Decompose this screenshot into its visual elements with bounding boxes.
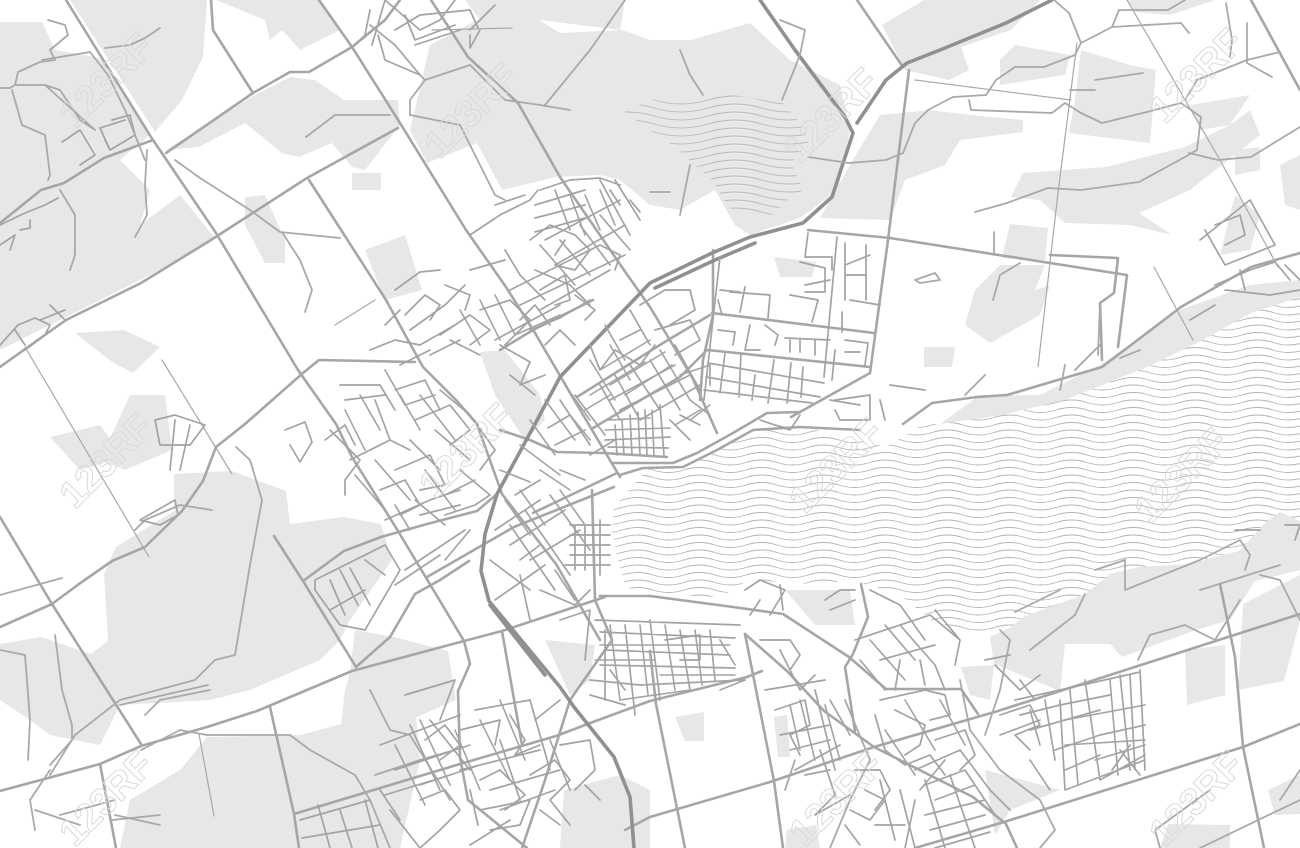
watermark: 123RF [782, 411, 892, 521]
watermark: 123RF [52, 406, 162, 516]
watermark: 123RF [1142, 21, 1252, 131]
watermark: 123RF [52, 26, 162, 136]
watermark: 123RF [417, 56, 527, 166]
extra dense blocks [345, 190, 1145, 810]
highway [481, 0, 1052, 848]
watermark: 123RF [412, 396, 522, 506]
lake: small northern reservoir [625, 96, 808, 215]
lake: main [612, 298, 1300, 630]
watermark: 123RF [1127, 421, 1237, 531]
watermark: 123RF [777, 61, 887, 171]
